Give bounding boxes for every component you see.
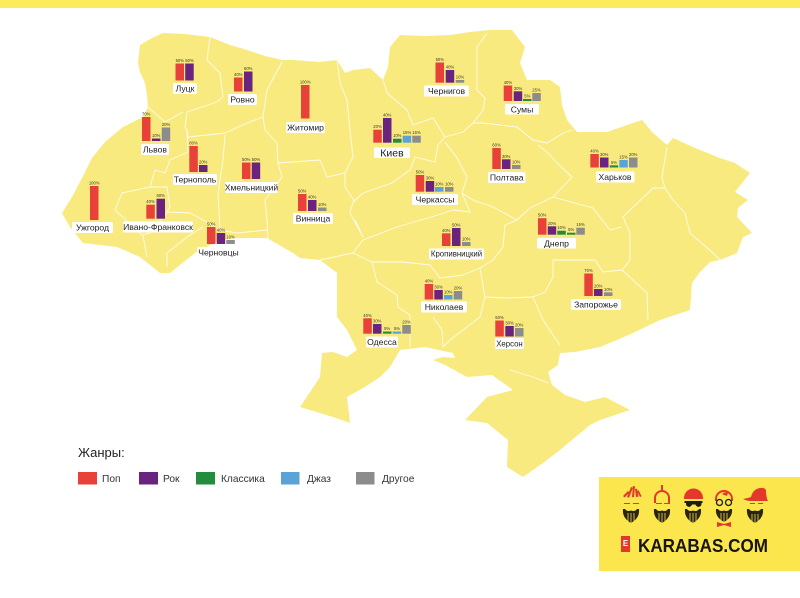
bars: Днепр: 50% <box>538 213 547 218</box>
bars: Тернополь <box>189 140 208 172</box>
bars: Чернигов: 40% <box>446 64 454 70</box>
bars: Чернигов: 10% <box>456 74 464 80</box>
chart: Луцк <box>173 58 197 94</box>
icon: ticket mark: E <box>623 539 629 548</box>
bars: Кропивницкий: 40% <box>442 228 451 233</box>
chart: Харьков <box>590 148 638 182</box>
bars: Харьков <box>590 148 638 168</box>
chart: Житомир <box>286 80 325 133</box>
bars: Сумы: 40% <box>504 80 512 85</box>
legend: Другое <box>356 472 415 485</box>
bars: Одесса: 5% <box>384 326 390 331</box>
chart: Сумы <box>504 80 541 114</box>
label: Тернополь: Тернополь <box>174 174 217 184</box>
bars: Днепр: 20% <box>548 221 556 226</box>
legend: Классика <box>196 472 265 485</box>
chart: Ужгород <box>72 180 113 233</box>
bars: Черкассы: 50% <box>416 170 424 174</box>
bars: Хмельницкий: 50% <box>252 157 260 162</box>
icon: ticket mark <box>621 536 630 552</box>
label: Львов: Львов <box>143 144 167 154</box>
top yellow band <box>0 0 800 8</box>
bars: Днепр: 15% <box>576 222 585 227</box>
chart: Кропивницкий <box>429 222 484 260</box>
bars: Тернополь: 20% <box>199 160 208 164</box>
legend: Поп <box>78 472 121 485</box>
bars: Хмельницкий: 50% <box>242 157 251 162</box>
bars: Полтава: 10% <box>512 160 521 164</box>
bars: Днепр: 10% <box>557 225 566 230</box>
bars: Хмельницкий <box>242 157 260 179</box>
label: Николаев: Николаев <box>425 302 464 312</box>
bars: Кропивницкий <box>442 222 471 246</box>
legend: Рок <box>139 472 180 485</box>
legend: Поп: Поп <box>102 474 121 485</box>
bars: Харьков: 40% <box>590 148 599 154</box>
bars: Одесса: 30% <box>373 318 382 324</box>
bars: Днепр <box>538 213 585 235</box>
bars: Николаев: 10% <box>444 290 453 294</box>
bars: Харьков: 30% <box>600 152 609 157</box>
bars: Одесса: 20% <box>402 320 411 324</box>
legend <box>78 445 415 485</box>
bars: Винница: 10% <box>318 202 327 207</box>
bars: Луцк: 50% <box>176 58 184 63</box>
label: Ивано-Франковск: Ивано-Франковск <box>123 222 193 232</box>
bars: Ивано-Франковск: 60% <box>157 193 165 198</box>
bars: Сумы: 30% <box>514 86 522 91</box>
label: Днепр: Днепр <box>544 238 569 248</box>
chart: Херсон <box>495 315 524 349</box>
label: Киев: Киев <box>380 148 404 160</box>
bars: Киев: 15% <box>412 130 421 135</box>
bars: Николаев: 40% <box>425 278 433 284</box>
label: Чернигов: Чернигов <box>428 86 465 96</box>
bars: Ровно <box>234 66 253 92</box>
label: Херсон: Херсон <box>496 340 523 348</box>
legend: Другое: Другое <box>382 474 415 485</box>
bars: Сумы: 25% <box>532 88 541 92</box>
bars: Николаев <box>425 278 462 300</box>
bars: Запорожье: 70% <box>584 268 593 273</box>
bars: Сумы <box>504 80 541 101</box>
icon: face with red cap <box>743 488 768 523</box>
chart: Черкассы <box>412 170 458 205</box>
bars: Ивано-Франковск: 40% <box>146 199 155 204</box>
bars: Киев: 10% <box>393 133 402 138</box>
bars: Одесса: 5% <box>394 326 400 331</box>
bars: Ровно: 40% <box>234 72 243 77</box>
label: Винница: Винница <box>296 214 330 224</box>
label: Харьков: Харьков <box>599 172 632 182</box>
legend: Джаз: Джаз <box>307 474 331 485</box>
bars: Кропивницкий: 50% <box>452 222 461 228</box>
bars: Черкассы <box>416 170 454 192</box>
chart: Ровно <box>228 66 257 105</box>
icon: face with round glasses and bow tie <box>715 490 733 527</box>
chart: Тернополь <box>173 140 217 185</box>
bars: Черновцы: 50% <box>207 222 216 226</box>
label: Луцк: Луцк <box>176 84 195 94</box>
bars: Винница: 40% <box>308 194 317 200</box>
bars: Черкассы: 10% <box>445 182 454 186</box>
bars: Львов: 20% <box>162 122 170 127</box>
bars: Полтава <box>492 142 521 169</box>
bars: Запорожье <box>584 268 613 296</box>
chart: Николаев <box>421 278 467 312</box>
chart: Хмельницкий <box>225 157 278 193</box>
bars: Львов: 10% <box>152 133 161 138</box>
bars: Киев: 40% <box>383 112 392 118</box>
chart: Чернигов <box>424 57 469 96</box>
bars: Одесса: 40% <box>363 313 372 318</box>
bars: Черкассы: 10% <box>435 182 444 186</box>
icon: face with red hair and glasses <box>684 489 703 523</box>
bars: Ивано-Франковск <box>146 193 165 219</box>
bars: Тернополь: 80% <box>189 140 198 146</box>
label: Ужгород: Ужгород <box>76 222 109 232</box>
label: Черновцы: Черновцы <box>198 248 239 258</box>
bars: Львов <box>142 112 170 141</box>
chart: Полтава <box>488 142 526 183</box>
bars: Днепр: 5% <box>568 227 574 232</box>
bars: Харьков: 15% <box>619 154 628 160</box>
bars: Житомир: 100% <box>300 80 311 84</box>
bars: Ровно: 60% <box>244 66 253 71</box>
bars: Черновцы: 10% <box>226 234 235 240</box>
bars: Николаев: 20% <box>454 286 462 290</box>
legend: Классика: Классика <box>221 474 265 485</box>
legend: Джаз <box>281 472 331 485</box>
icon: face with flame hair <box>623 486 642 523</box>
bars: Черновцы <box>207 222 235 244</box>
bars: Запорожье: 20% <box>594 284 603 288</box>
bars: Запорожье: 10% <box>604 287 613 292</box>
bars: Черновцы: 40% <box>217 228 225 232</box>
chart: Львов <box>141 112 170 155</box>
bars: Херсон: 50% <box>495 315 504 320</box>
label: Хмельницкий: Хмельницкий <box>225 182 278 192</box>
chart: Винница <box>293 188 333 224</box>
bars: Харьков: 5% <box>611 160 617 165</box>
logo wordmark: KARABAS.COM <box>638 535 768 556</box>
bars: Ужгород: 100% <box>89 180 100 186</box>
legend: Рок: Рок <box>163 474 180 485</box>
logo panel: Karabas <box>599 477 800 571</box>
label: Кропивницкий: Кропивницкий <box>431 250 482 259</box>
chart: Запорожье <box>571 268 621 310</box>
label: Ровно: Ровно <box>230 94 255 104</box>
bars: Одесса <box>363 313 411 334</box>
bars: Херсон <box>495 315 524 336</box>
chart: Черновцы <box>197 222 240 258</box>
label: Полтава: Полтава <box>490 172 524 182</box>
bars: Полтава: 30% <box>502 154 511 159</box>
bars: Винница <box>298 188 327 211</box>
bars: Чернигов <box>436 57 464 83</box>
bars: Харьков: 20% <box>629 152 638 157</box>
bars: Николаев: 30% <box>434 284 443 290</box>
bars: Полтава: 60% <box>492 142 501 148</box>
bars: Львов: 70% <box>142 112 151 116</box>
label: Запорожье: Запорожье <box>574 300 618 310</box>
bars: Луцк <box>176 58 194 80</box>
map of Ukraine <box>62 30 752 477</box>
chart: Ивано-Франковск <box>123 193 193 232</box>
label: Житомир: Житомир <box>287 122 324 132</box>
bars: Киев <box>373 112 421 143</box>
legend heading: Жанры: <box>78 445 125 460</box>
bars: Черкассы: 30% <box>426 176 434 180</box>
chart: Днепр <box>537 213 585 248</box>
bars: Киев: 15% <box>403 130 411 135</box>
icon: face with mohawk helmet <box>654 485 670 523</box>
bars: Херсон: 20% <box>515 322 524 328</box>
bars: Чернигов: 50% <box>436 57 444 62</box>
bars: Луцк: 50% <box>185 58 194 63</box>
label: Черкассы: Черкассы <box>416 194 454 204</box>
chart: Киев <box>373 112 421 160</box>
bars: Винница: 50% <box>298 188 307 194</box>
bars: Херсон: 30% <box>505 320 514 326</box>
label: Одесса: Одесса <box>367 337 397 347</box>
bars: Кропивницкий: 10% <box>462 236 471 242</box>
bars: Сумы: 5% <box>524 94 531 98</box>
chart: Одесса <box>363 313 411 348</box>
bars: Киев: 20% <box>373 124 382 129</box>
label: Сумы: Сумы <box>511 104 533 114</box>
